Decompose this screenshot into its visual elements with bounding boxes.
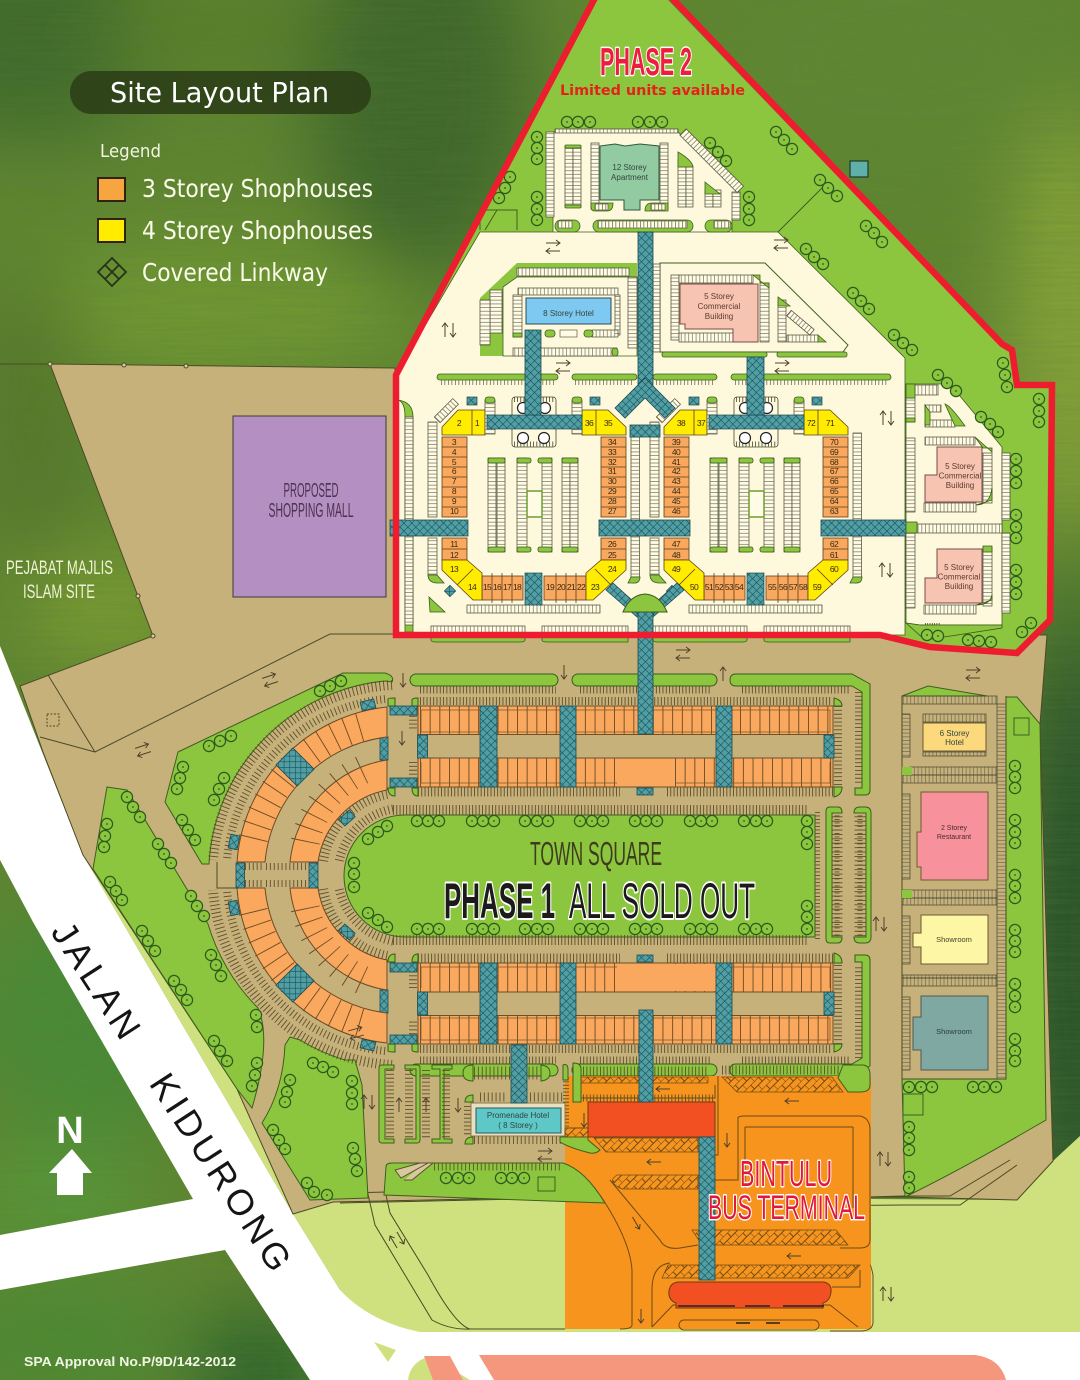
shop unit numbers, block 1: 18 (513, 582, 522, 592)
8 storey hotel: 8 Storey Hotel (543, 309, 594, 318)
shop unit numbers, block 1 (450, 418, 617, 592)
terminal covered linkways (638, 632, 715, 1280)
shop unit numbers, block 2: 39 (672, 437, 681, 447)
shop unit numbers, block 2: 40 (672, 447, 681, 457)
8 storey hotel (526, 298, 611, 324)
south row extension (675, 964, 715, 991)
6 storey hotel (923, 723, 986, 751)
shop unit numbers, block 1: 33 (608, 447, 617, 457)
shop unit numbers, block 2: 70 (830, 437, 839, 447)
shop unit numbers, block 1: 21 (567, 582, 576, 592)
shop unit numbers, block 2: 59 (813, 582, 822, 592)
legend: Legend (100, 141, 161, 162)
shop unit numbers, block 1: 36 (585, 418, 594, 428)
heading: town square: TOWN SQUARE (530, 835, 662, 872)
5 storey commercial building, upper right: Commercial (939, 472, 982, 480)
showroom teal (913, 996, 988, 1070)
town square east parking islands (818, 807, 871, 943)
green parcel south of hotel (384, 1163, 605, 1203)
shop unit numbers, block 1: 3 (452, 437, 457, 447)
shop unit numbers, block 1: 5 (452, 457, 457, 467)
phase 2 red boundary (396, 0, 1052, 653)
green bars above shop blocks (398, 374, 891, 632)
shop unit numbers, block 1: 17 (503, 582, 512, 592)
heading: bintulu bus terminal: BUS TERMINAL (708, 1189, 865, 1227)
shop unit numbers, block 1: 28 (608, 496, 617, 506)
shop unit numbers, block 2: 62 (830, 539, 839, 549)
heading: phase 2 (560, 41, 745, 99)
green landscape parcels, phase 1 (93, 673, 1046, 1200)
shop unit numbers, block 2: 42 (672, 466, 681, 476)
shop unit numbers, block 1: 25 (608, 550, 617, 560)
shop unit numbers, block 2: 55 (768, 582, 777, 592)
shop unit numbers, block 1: 19 (546, 582, 555, 592)
shop unit numbers, block 2: 56 (779, 582, 788, 592)
shop unit numbers, block 2: 49 (672, 564, 681, 574)
shop unit numbers, block 2: 53 (725, 582, 734, 592)
shop unit numbers, block 2: 72 (807, 418, 816, 428)
bus terminal orange plot (565, 1076, 871, 1329)
heading: phase 1 all sold out (444, 873, 755, 929)
6 storey hotel: 6 Storey (940, 729, 969, 738)
shop unit numbers, block 1: 1 (475, 418, 480, 428)
5 storey commercial building, lower right: Commercial (938, 572, 981, 582)
crescent centre details (236, 863, 318, 888)
right commercial parking (906, 384, 1010, 640)
shop unit numbers, block 2: 38 (677, 418, 686, 428)
map title: site layout plan: Site Layout Plan (110, 76, 329, 109)
phase 2 green ground (396, 0, 1052, 653)
shop unit numbers, block 2: 51 (705, 582, 714, 592)
heading: phase 1 all sold out: PHASE 1 (444, 873, 555, 929)
heading: phase 2: PHASE 2 (600, 41, 692, 84)
shop unit numbers, block 2: 69 (830, 447, 839, 457)
promenade hotel parking (379, 1063, 581, 1191)
5 storey commercial building, centre (680, 284, 758, 342)
shop block 1 (428, 397, 640, 642)
site boundary lines (0, 362, 1017, 1329)
shop unit numbers, block 1: 6 (452, 466, 457, 476)
shop unit numbers, block 2: 66 (830, 476, 839, 486)
shop unit numbers, block 2: 37 (697, 418, 706, 428)
2 storey restaurant (917, 792, 988, 880)
shop unit numbers, block 1: 7 (452, 476, 457, 486)
shop unit numbers, block 2: 68 (830, 457, 839, 467)
shop unit numbers, block 2: 46 (672, 506, 681, 516)
5 storey commercial building, centre: Commercial (698, 302, 741, 311)
5 storey commercial building, upper right (925, 447, 982, 502)
shop unit numbers, block 1: 30 (608, 476, 617, 486)
heading: bintulu bus terminal: BINTULU (740, 1153, 832, 1194)
apartment block parking (546, 129, 743, 232)
shop unit numbers, block 2: 57 (789, 582, 798, 592)
promenade covered linkway (511, 1045, 527, 1103)
shop unit numbers, block 1: 24 (608, 564, 617, 574)
shop unit numbers, block 2: 50 (690, 582, 699, 592)
small teal square (850, 161, 868, 177)
phase 1 north shophouse rows (213, 674, 870, 866)
bus terminal building south (669, 1282, 831, 1323)
heading: phase 2: Limited units available (560, 83, 745, 99)
shop unit numbers, block 2: 44 (672, 486, 681, 496)
shop unit numbers, block 2: 63 (830, 506, 839, 516)
shop unit numbers, block 2: 41 (672, 457, 681, 467)
shop unit numbers, block 1: 8 (452, 486, 457, 496)
light green verge (83, 855, 1080, 1332)
site label: Pejabat Majlis Islam: ISLAM SITE (23, 582, 95, 603)
commercial block parking (653, 263, 848, 357)
shop unit numbers, block 1: 27 (608, 506, 617, 516)
shop unit numbers, block 1: 4 (452, 447, 457, 457)
12 storey apartment: Apartment (611, 173, 649, 182)
2 storey restaurant: 2 Storey (941, 825, 968, 832)
proposed shopping mall (233, 416, 386, 597)
shop unit numbers, block 1: 26 (608, 539, 617, 549)
shop unit numbers, block 1: 23 (591, 582, 600, 592)
shop unit numbers, block 1: 12 (450, 550, 459, 560)
shop unit numbers, block 2: 67 (830, 466, 839, 476)
5 storey commercial building, upper right: Building (946, 481, 974, 490)
shop unit numbers, block 1: 22 (577, 582, 586, 592)
12 storey apartment: 12 Storey (612, 163, 647, 172)
central green dome (623, 594, 667, 612)
shop unit numbers, block 2 (672, 418, 839, 592)
shop unit numbers, block 1: 31 (608, 466, 617, 476)
shop unit numbers, block 2: 54 (735, 582, 744, 592)
shop unit numbers, block 1: 9 (452, 496, 457, 506)
2 storey restaurant: Restaurant (937, 834, 971, 841)
shop block 2 (650, 397, 862, 642)
approval note: SPA Approval No.P/9D/142-2012 (24, 1354, 236, 1369)
promenade hotel: ( 8 Storey ) (498, 1121, 538, 1130)
phase 1 south shophouse rows (213, 884, 870, 1076)
shop unit numbers, block 2: 71 (826, 418, 835, 428)
shop unit numbers, block 1: 29 (608, 486, 617, 496)
site label: Pejabat Majlis Islam: PEJABAT MAJLIS (6, 558, 113, 579)
trees (98, 116, 1045, 1201)
town square lawn (344, 815, 815, 937)
right column parking (902, 696, 1029, 1115)
north arrow (49, 1110, 92, 1195)
legend: 4 Storey Shophouses (142, 216, 373, 245)
showroom yellow (913, 915, 988, 964)
bus terminal building north (588, 1102, 715, 1137)
shop unit numbers, block 1: 11 (450, 539, 459, 549)
5 storey commercial building, centre: 5 Storey (704, 292, 734, 301)
legend: 3 Storey Shophouses (142, 174, 373, 203)
tan site base (20, 364, 1053, 1214)
site label: Pejabat Majlis Islam (6, 558, 113, 603)
showroom yellow: Showroom (936, 935, 972, 944)
5 storey commercial building, lower right (925, 549, 982, 603)
north arrow: N (56, 1110, 84, 1152)
bottom salmon plot (374, 1342, 1006, 1380)
5 storey commercial building, lower right: 5 Storey (944, 563, 974, 572)
phase 2 thin lines (480, 187, 823, 232)
heading: phase 1 all sold out: ALL SOLD OUT (569, 873, 755, 929)
shop unit numbers, block 1: 34 (608, 437, 617, 447)
shop unit numbers, block 1: 14 (468, 582, 477, 592)
legend: Covered Linkway (142, 258, 328, 287)
shop unit numbers, block 1: 13 (450, 564, 459, 574)
road: Jalan Kidurong (0, 646, 1080, 1380)
12 storey apartment (600, 144, 659, 210)
6 storey hotel: Hotel (945, 738, 964, 747)
promenade hotel: Promenade Hotel (487, 1111, 549, 1120)
shop unit numbers, block 2: 45 (672, 496, 681, 506)
shop unit numbers, block 2: 52 (715, 582, 724, 592)
traffic arrows (134, 237, 980, 1323)
shop unit numbers, block 1: 10 (450, 506, 459, 516)
shop unit numbers, block 2: 61 (830, 550, 839, 560)
shop unit numbers, block 2: 47 (672, 539, 681, 549)
shop unit numbers, block 2: 60 (830, 564, 839, 574)
hotel block parking (480, 263, 637, 356)
showroom teal: Showroom (936, 1027, 972, 1036)
phase 2 covered linkways (390, 232, 906, 634)
road name: Jalan Kidurong: JALAN KIDURONG (43, 914, 300, 1279)
proposed shopping mall: PROPOSED (284, 480, 338, 502)
shop unit numbers, block 2: 65 (830, 486, 839, 496)
bus terminal details (560, 1065, 873, 1331)
5 storey commercial building, upper right: 5 Storey (945, 462, 975, 471)
shop unit numbers, block 1: 2 (457, 418, 462, 428)
shop unit numbers, block 1: 35 (604, 418, 613, 428)
shop unit numbers, block 2: 48 (672, 550, 681, 560)
shop unit numbers, block 2: 43 (672, 476, 681, 486)
shop unit numbers, block 2: 64 (830, 496, 839, 506)
5 storey commercial building, centre: Building (705, 312, 733, 321)
proposed shopping mall: SHOPPING MALL (268, 500, 354, 522)
shop unit numbers, block 1: 32 (608, 457, 617, 467)
shop unit numbers, block 1: 20 (557, 582, 566, 592)
shop unit numbers, block 1: 15 (483, 582, 492, 592)
map title: site layout plan (70, 71, 371, 114)
promenade hotel (471, 1103, 565, 1136)
legend (98, 141, 373, 287)
heading: bintulu bus terminal (708, 1153, 865, 1227)
shop unit numbers, block 2: 58 (799, 582, 808, 592)
shop unit numbers, block 1: 16 (493, 582, 502, 592)
5 storey commercial building, lower right: Building (945, 582, 973, 591)
phase 2 cream road area (396, 132, 1002, 635)
